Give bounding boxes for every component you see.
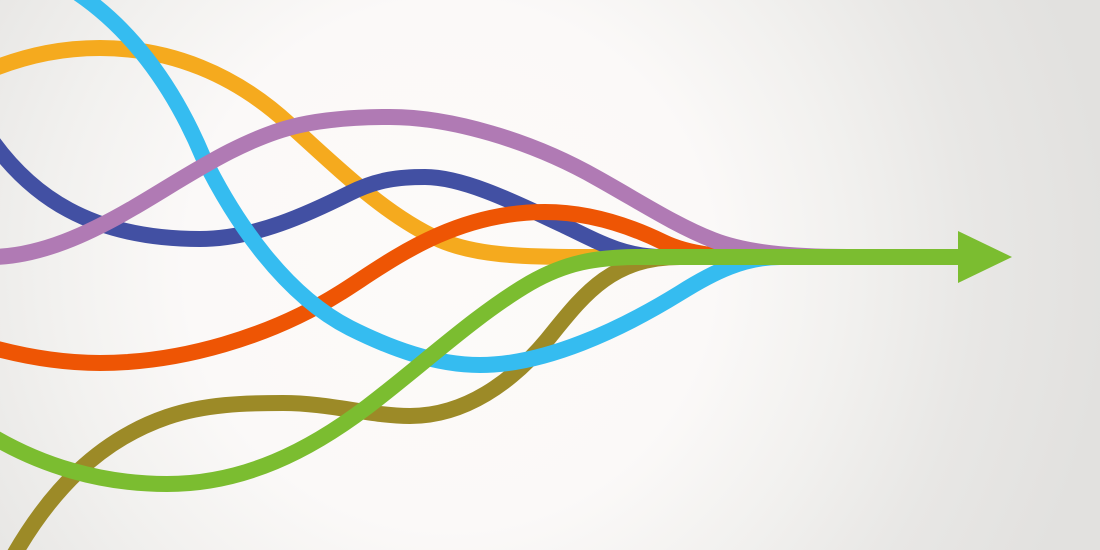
line: olive	[10, 257, 800, 550]
arrow: green line with arrowhead	[0, 231, 1012, 484]
line: dark blue	[0, 138, 800, 257]
line: light blue	[60, 0, 850, 365]
line: yellow	[0, 48, 800, 257]
line: orange	[0, 212, 800, 363]
line: purple	[0, 117, 900, 257]
